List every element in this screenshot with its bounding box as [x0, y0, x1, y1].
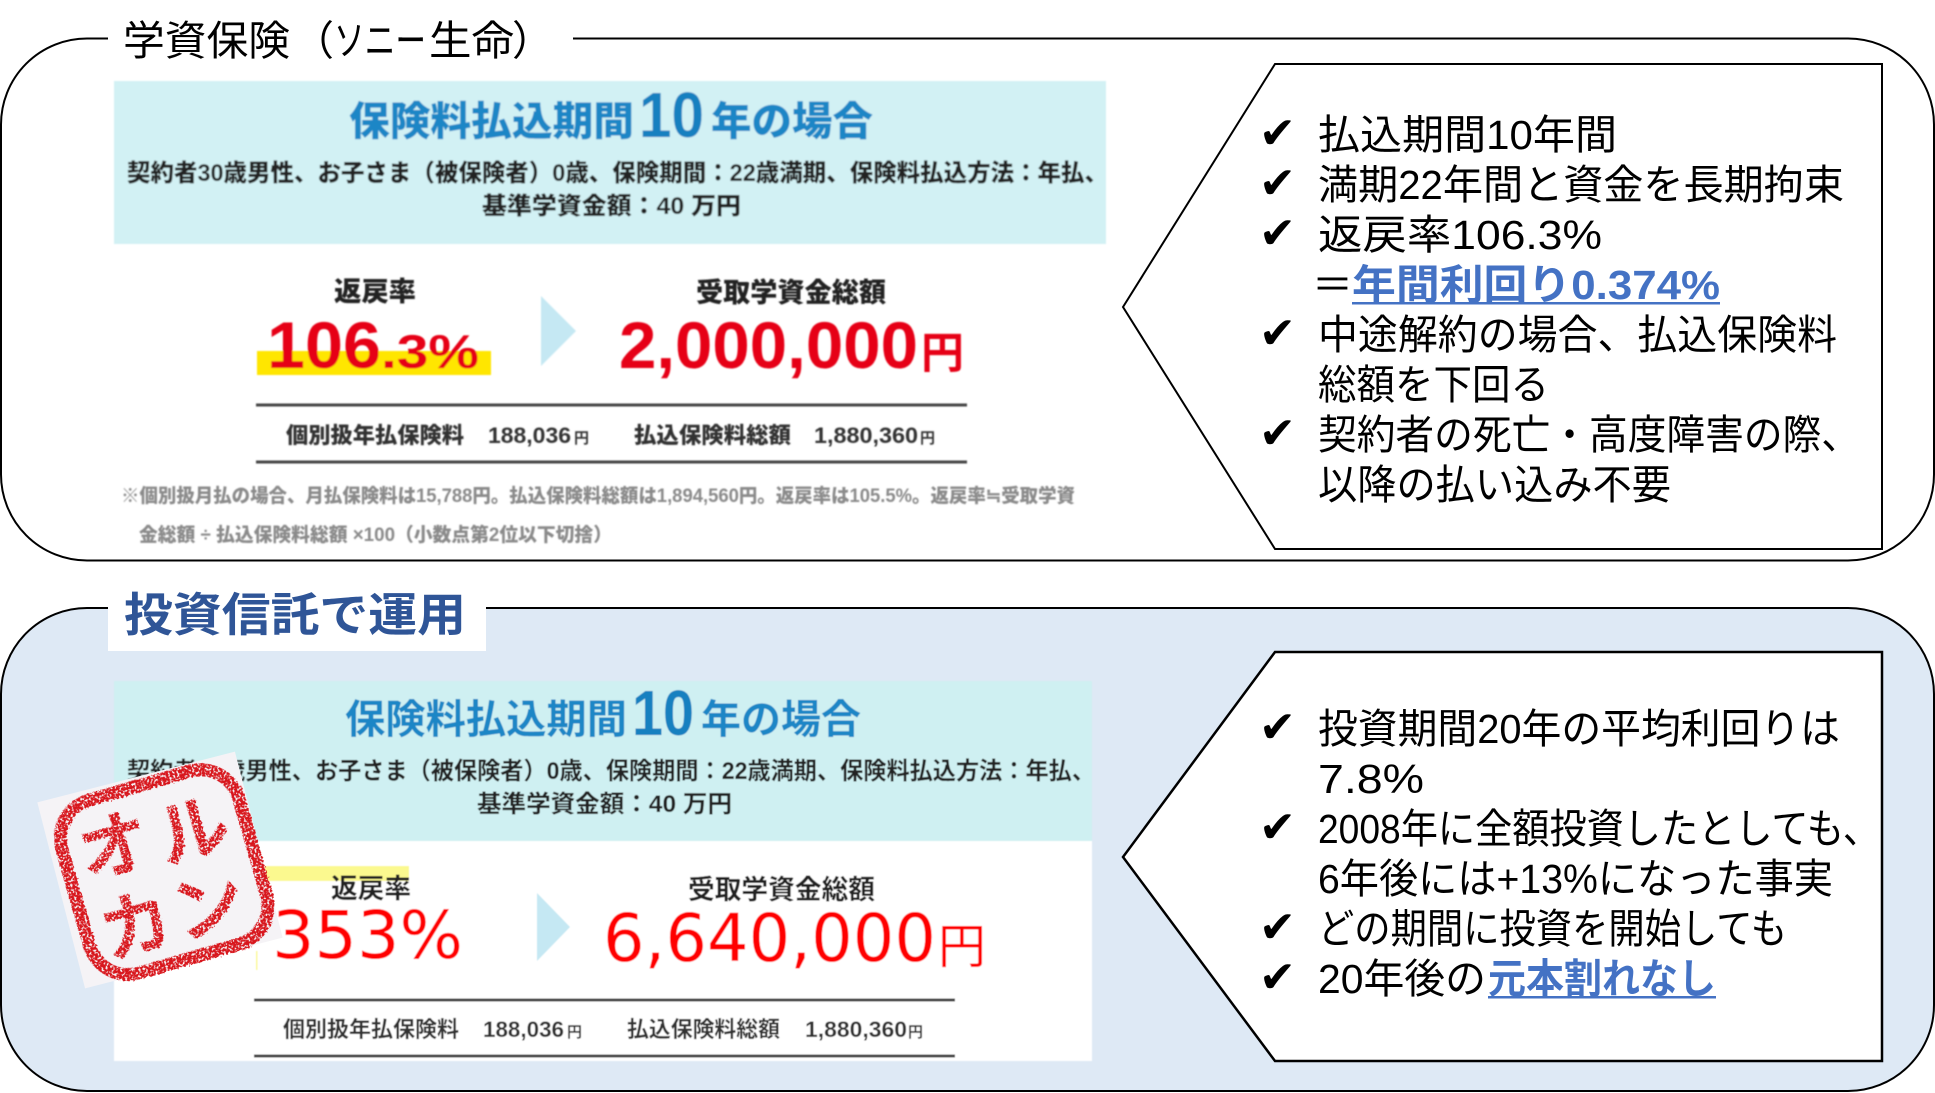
total received: 円	[938, 921, 986, 974]
total received	[619, 278, 964, 382]
check list: 2008年に全額投資したとしても、	[1318, 806, 1880, 852]
check list: ✔	[1259, 952, 1296, 1003]
callout: insurance notes	[1123, 64, 1882, 549]
check list: 以降の払い込み不要	[1318, 462, 1671, 508]
check list: 7.8%	[1318, 756, 1424, 802]
check list: 6年後には+13%になった事実	[1318, 856, 1833, 902]
footnote	[121, 484, 1075, 546]
total received: 6,640,000	[603, 900, 936, 977]
return rate: 106	[267, 308, 381, 382]
check list: 返戻率106.3%	[1318, 212, 1602, 258]
plan heading: 年の場合	[701, 698, 861, 742]
heading: gakushi hoken: （	[293, 18, 334, 64]
premium row: 個別扱年払保険料	[283, 1017, 459, 1042]
total received: 2,000,000	[619, 308, 918, 382]
heading: gakushi hoken: ソニー	[334, 18, 426, 64]
check list: 満期22年間と資金を長期拘束	[1318, 162, 1844, 208]
check list: ✔	[1259, 308, 1296, 359]
total received: 円	[921, 330, 964, 378]
premium row: 円	[567, 1024, 582, 1041]
return rate	[256, 866, 463, 974]
stamp: all country: ル	[147, 783, 239, 880]
plan conditions	[127, 758, 1095, 818]
return rate: 返戻率	[331, 874, 411, 904]
arrow	[541, 296, 576, 366]
check list: 元本割れなし	[1488, 956, 1716, 1002]
plan heading	[345, 677, 861, 749]
stamp: all country	[37, 752, 283, 988]
premium row: 1,880,360	[805, 1017, 907, 1042]
footnote: ※個別扱月払の場合、月払保険料は15,788円。払込保険料総額は1,894,560円。返戻率は105.5%。返戻率≒受取学資	[121, 484, 1075, 507]
callout: investment notes	[1123, 652, 1882, 1061]
panel: gakushi hoken	[1, 12, 1934, 560]
total received	[603, 875, 986, 977]
return rate: 353%	[272, 897, 463, 974]
check list: ✔	[1259, 802, 1296, 853]
check list: 総額を下回る	[1318, 362, 1549, 408]
plan heading: 10	[639, 79, 704, 151]
check list: ✔	[1259, 408, 1296, 459]
header band	[114, 681, 1092, 841]
check list: 年間利回り0.374%	[1352, 262, 1720, 308]
plan conditions: 基準学資金額：40 万円	[477, 791, 732, 818]
premium row	[256, 405, 967, 462]
check list: 中途解約の場合、払込保険料	[1318, 312, 1837, 358]
premium row: 188,036	[483, 1017, 564, 1042]
premium row: 円	[920, 430, 935, 447]
check list: ✔	[1259, 902, 1296, 953]
plan heading: 10	[632, 677, 694, 749]
total received: 受取学資金総額	[688, 875, 875, 905]
plan conditions: 基準学資金額：40 万円	[482, 192, 741, 220]
premium row: 円	[574, 430, 589, 447]
plan conditions	[127, 159, 1108, 220]
premium row: 個別扱年払保険料	[286, 423, 464, 448]
stamp: all country: オ	[69, 799, 160, 896]
panel outline	[1, 38, 1934, 560]
check list: 契約者の死亡・高度障害の際、	[1318, 412, 1860, 458]
premium row: 円	[908, 1024, 923, 1041]
return rate	[257, 277, 491, 382]
premium row: 188,036	[488, 423, 571, 448]
return rate: 返戻率	[334, 277, 416, 307]
plan conditions: 契約者30歳男性、お子さま（被保険者）0歳、保険期間：22歳満期、保険料払込方法：年払、	[127, 758, 1095, 785]
stamp: all country: カ	[90, 878, 182, 975]
check list: ✔	[1259, 108, 1296, 159]
arrow	[537, 893, 570, 961]
header band	[114, 81, 1106, 244]
plan heading: 保険料払込期間	[345, 698, 627, 742]
heading: gakushi hoken: ）	[512, 18, 553, 64]
check list: ✔	[1259, 208, 1296, 259]
panel outline	[1, 608, 1934, 1091]
heading: toushi shintaku: 投資信託で運用	[124, 589, 466, 641]
plan conditions: 契約者30歳男性、お子さま（被保険者）0歳、保険期間：22歳満期、保険料払込方法：年払、	[127, 159, 1108, 187]
heading: gakushi hoken: 学資保険	[123, 18, 290, 64]
check list: 払込期間10年間	[1318, 112, 1617, 158]
plan heading: 保険料払込期間	[349, 100, 634, 144]
image: insurance plan table	[114, 79, 1108, 546]
stamp: all country: ン	[163, 859, 254, 955]
check list: 投資期間20年の平均利回りは	[1318, 706, 1840, 752]
check list: 20年後の	[1318, 956, 1486, 1002]
heading: toushi shintaku	[108, 584, 486, 651]
image: investment plan table	[114, 677, 1095, 1061]
footnote: 金総額 ÷ 払込保険料総額 ×100（小数点第2位以下切捨）	[139, 523, 612, 546]
premium row	[254, 1000, 955, 1056]
plan heading	[349, 79, 873, 151]
total received: 受取学資金総額	[696, 278, 886, 308]
premium row: 払込保険料総額	[627, 1017, 780, 1042]
panel: toushi shintaku	[1, 584, 1934, 1091]
check list: ＝	[1312, 262, 1353, 308]
check list: どの期間に投資を開始しても	[1318, 906, 1787, 952]
premium row: 1,880,360	[814, 423, 918, 448]
check list	[1259, 702, 1880, 1003]
premium row: 払込保険料総額	[634, 423, 791, 448]
heading: gakushi hoken	[108, 12, 573, 64]
heading: gakushi hoken: 生命	[429, 18, 514, 64]
check list: ✔	[1259, 158, 1296, 209]
return rate: .3%	[381, 325, 479, 378]
plan heading: 年の場合	[711, 100, 873, 144]
check list	[1259, 108, 1860, 508]
check list: ✔	[1259, 702, 1296, 753]
